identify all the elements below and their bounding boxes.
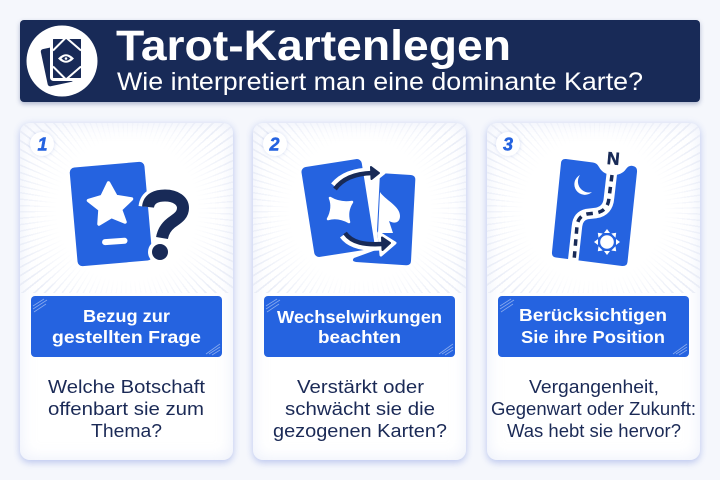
- label button 1: [31, 296, 222, 357]
- badge: number 2: 2: [268, 134, 280, 154]
- text: description 1: offenbart sie zum: [48, 398, 204, 419]
- label button 2: Wechselwirkungen: [277, 307, 442, 327]
- text: description 2: Verstärkt oder: [297, 376, 424, 397]
- subtitle: Wie interpretiert man eine dominante Karte?: [117, 68, 643, 96]
- text: description 3: Gegenwart oder Zukunft:: [491, 398, 696, 419]
- panel: card 3: [487, 123, 700, 460]
- icon: card with road and compass: [552, 148, 637, 266]
- text: description 1: [48, 376, 205, 441]
- badge: number 3: [496, 132, 520, 156]
- label button 1: gestellten Frage: [52, 327, 201, 347]
- header banner: [20, 20, 700, 102]
- label button 2: [264, 296, 455, 357]
- icon: two cards with exchange arrows: [301, 158, 415, 265]
- label button 3: [498, 296, 689, 357]
- icon: card with star and question mark: [69, 161, 183, 267]
- badge: number 3: 3: [503, 134, 513, 154]
- panel: card 2: [253, 123, 466, 460]
- label button 1: Bezug zur: [83, 306, 170, 326]
- label button 3: Berücksichtigen: [519, 305, 667, 325]
- text: description 3: Was hebt sie hervor?: [507, 420, 681, 441]
- text: description 3: Vergangenheit,: [529, 376, 659, 397]
- text: description 2: schwächt sie die: [285, 398, 435, 419]
- title: Tarot-Kartenlegen: [116, 22, 511, 70]
- text: description 1: Welche Botschaft: [48, 376, 205, 397]
- text: description 3: [491, 376, 696, 441]
- label button 2: beachten: [318, 327, 401, 347]
- icon: tarot cards with eye: [26, 26, 98, 96]
- text: description 1: Thema?: [91, 420, 162, 441]
- badge: number 2: [263, 132, 287, 156]
- icon: compass N: N: [606, 148, 620, 169]
- label button 3: Sie ihre Position: [521, 327, 665, 347]
- text: description 2: [273, 376, 447, 441]
- text: description 2: gezogenen Karten?: [273, 420, 447, 441]
- badge: number 1: [30, 132, 54, 156]
- panel: card 1: [20, 123, 233, 460]
- badge: number 1: 1: [38, 134, 48, 154]
